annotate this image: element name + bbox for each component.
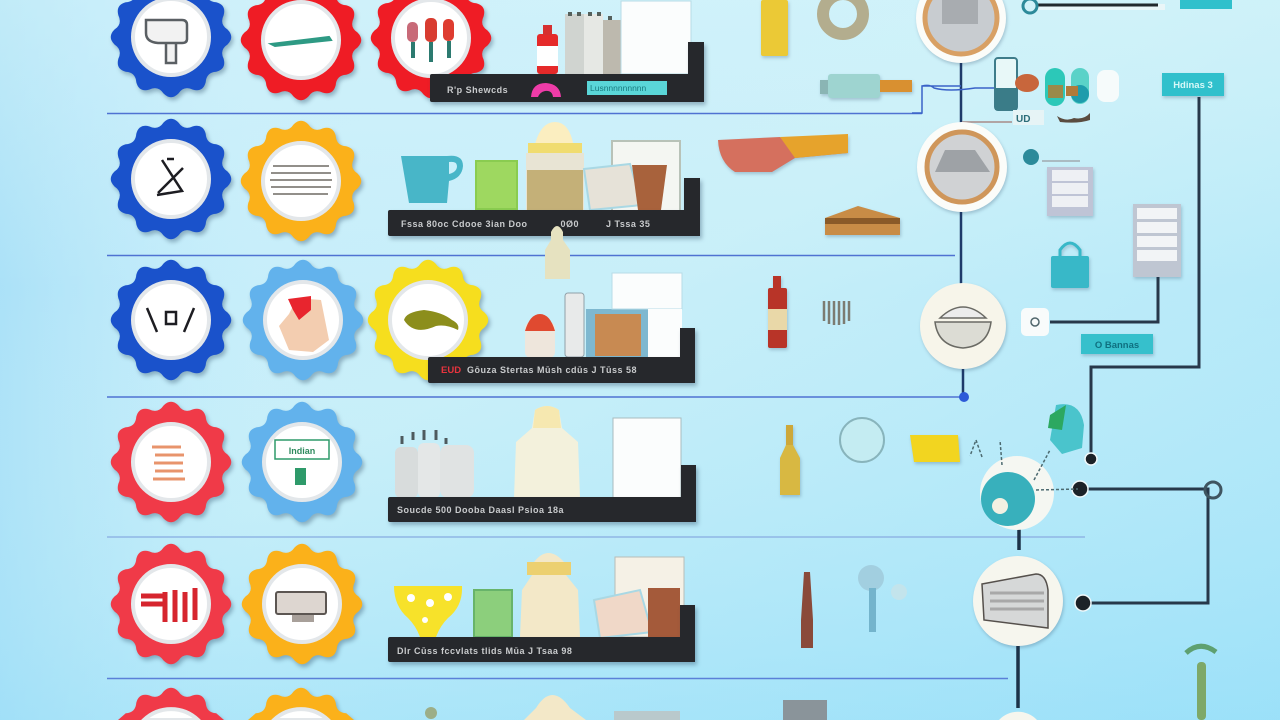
dark paint brush xyxy=(801,572,813,648)
shelf 4 caption: Soucde 500 Dooba Daasl Psioa 18a xyxy=(397,505,565,515)
round dial 3 bowl xyxy=(920,283,1006,369)
shelf 1 caption: R'p Shewcds xyxy=(447,85,508,95)
red bottle xyxy=(537,25,558,74)
gear: orange striped xyxy=(241,121,361,241)
icon: teal lock xyxy=(1051,243,1089,288)
teal figure xyxy=(1050,404,1084,454)
gray document tall xyxy=(1133,204,1181,277)
tools column xyxy=(718,0,1216,720)
gear: light blue hand xyxy=(243,260,363,380)
dark wire A xyxy=(1091,97,1199,459)
shelf 1 teal tag xyxy=(587,81,667,95)
white carton xyxy=(612,273,682,309)
white carton xyxy=(613,418,681,498)
small green sprout xyxy=(425,707,437,719)
gear: red cropped xyxy=(118,688,224,720)
boxed food xyxy=(586,309,648,358)
shelf 2 caption: Fssa 80oc Cdooe 3ian Doo 0Ø0 xyxy=(401,219,579,229)
teal capsule left xyxy=(1045,68,1065,106)
row 1 gears xyxy=(111,0,491,100)
gray box xyxy=(783,700,827,720)
blue connector xyxy=(912,85,994,113)
shelf 3 items xyxy=(525,273,682,358)
tape ring xyxy=(823,0,863,34)
shelf 5 items xyxy=(394,553,684,638)
shelf 3 caption: EUD xyxy=(441,365,461,376)
note card xyxy=(594,590,652,638)
shelf 1 items xyxy=(537,1,691,74)
shelf 1 teal tag: Lusnnnnnnnnn xyxy=(590,83,647,93)
device body xyxy=(995,58,1017,110)
brown cup xyxy=(648,588,680,637)
shelf 4 items xyxy=(395,406,681,498)
shelf 4 bar xyxy=(388,465,696,522)
small round icon top xyxy=(1023,0,1037,13)
shelf 2 figures: J Tssa 35 xyxy=(606,219,650,229)
wire to icon xyxy=(1050,265,1158,322)
yellow tube xyxy=(761,0,788,56)
gear: orange cropped xyxy=(248,688,354,720)
small tag xyxy=(1013,110,1044,125)
teal label middle xyxy=(1081,334,1153,354)
gear: blue roller xyxy=(111,0,231,97)
node C xyxy=(1075,595,1091,611)
vertical spine top xyxy=(961,60,963,396)
shelf 3 bar xyxy=(428,328,695,383)
yellow bottle xyxy=(780,425,800,495)
red bottle xyxy=(768,276,787,348)
teal node dial xyxy=(970,404,1084,530)
rolling pin xyxy=(820,74,912,98)
blue end dot xyxy=(959,392,969,402)
cake slice xyxy=(825,206,900,235)
fan dial xyxy=(973,556,1063,646)
gear: red list lines xyxy=(111,402,231,522)
glass ring xyxy=(840,418,884,462)
polka dot cup xyxy=(394,586,462,637)
right connector wires xyxy=(912,4,1221,708)
green tool xyxy=(1186,646,1216,720)
knot node xyxy=(1205,482,1221,498)
gear: red three brushes xyxy=(371,0,491,98)
teal label upper xyxy=(1162,73,1224,96)
dark wire B xyxy=(1080,489,1208,603)
striped bottle xyxy=(520,553,580,637)
gear: light blue green sign: Indian xyxy=(289,446,315,456)
round dial 2 xyxy=(917,122,1007,212)
small round icon middle xyxy=(1023,149,1080,165)
white dots panel xyxy=(1097,70,1119,102)
top wire xyxy=(1035,4,1165,10)
gear: blue hourglass xyxy=(111,119,231,239)
cream bottle xyxy=(514,406,580,498)
white tube xyxy=(565,293,584,357)
row 5 gears xyxy=(111,544,362,664)
gear: red green bar xyxy=(241,0,361,100)
white carton xyxy=(615,557,684,637)
green box xyxy=(476,161,517,209)
brown cup xyxy=(632,165,667,210)
red jar xyxy=(525,314,555,358)
green box xyxy=(474,590,512,637)
blue spoon xyxy=(858,565,884,632)
grain jar xyxy=(526,122,584,210)
shelf 5 caption: Dlr Cūss fccvlats tlids Mūa J Tsaa 98 xyxy=(397,646,572,656)
shelf 2 items xyxy=(401,122,680,211)
blue pitcher xyxy=(401,156,463,203)
gray canisters xyxy=(395,430,474,498)
small tag: UD xyxy=(1016,114,1030,125)
gray canisters xyxy=(565,14,621,74)
teal dial leads xyxy=(970,440,1078,490)
icon: small white tile xyxy=(1021,308,1049,336)
salmon brush xyxy=(718,134,848,172)
lower spine xyxy=(1018,521,1019,708)
bottom dial xyxy=(999,712,1037,720)
teal label upper: Hdinas 3 xyxy=(1173,80,1213,91)
white box xyxy=(621,1,691,74)
row 3 gears xyxy=(111,260,488,380)
gear: blue sticks xyxy=(111,260,231,380)
shelf 1 bar xyxy=(430,42,704,102)
gear: yellow leaf xyxy=(368,260,488,380)
row 2 gears xyxy=(111,119,361,241)
teal capsule right xyxy=(1066,68,1089,104)
orange patch xyxy=(1015,74,1039,92)
gray side link xyxy=(962,121,1012,123)
small dot xyxy=(891,584,907,600)
dark mustache xyxy=(1057,113,1090,123)
cream bottle xyxy=(524,695,586,720)
note card xyxy=(584,164,642,210)
comb xyxy=(824,301,849,325)
gear: red labelled icon xyxy=(111,544,231,664)
gray label strip xyxy=(614,711,680,720)
row 6 gears xyxy=(118,688,354,720)
shelf 6 cropped items xyxy=(425,695,827,720)
device cluster xyxy=(995,0,1119,165)
node B xyxy=(1072,481,1088,497)
gear: light blue green sign xyxy=(242,402,362,522)
white carton xyxy=(612,141,680,211)
teal label middle: O Bannas xyxy=(1095,340,1139,351)
shelf 5 bar xyxy=(388,605,695,662)
shelf 3 bar: Gōuza Stertas Mūsh cdūs J Tūss 58 xyxy=(467,365,637,375)
gray document small xyxy=(1047,167,1093,216)
shelf 2 bar xyxy=(388,178,700,236)
cream bottle under shelf 2 xyxy=(545,226,570,279)
node A xyxy=(1085,453,1097,465)
row 4 gears xyxy=(111,402,362,522)
teal label top xyxy=(1180,0,1232,9)
gear: orange panel xyxy=(242,544,362,664)
yellow pouch xyxy=(910,435,960,462)
round dial 1 xyxy=(916,0,1006,63)
